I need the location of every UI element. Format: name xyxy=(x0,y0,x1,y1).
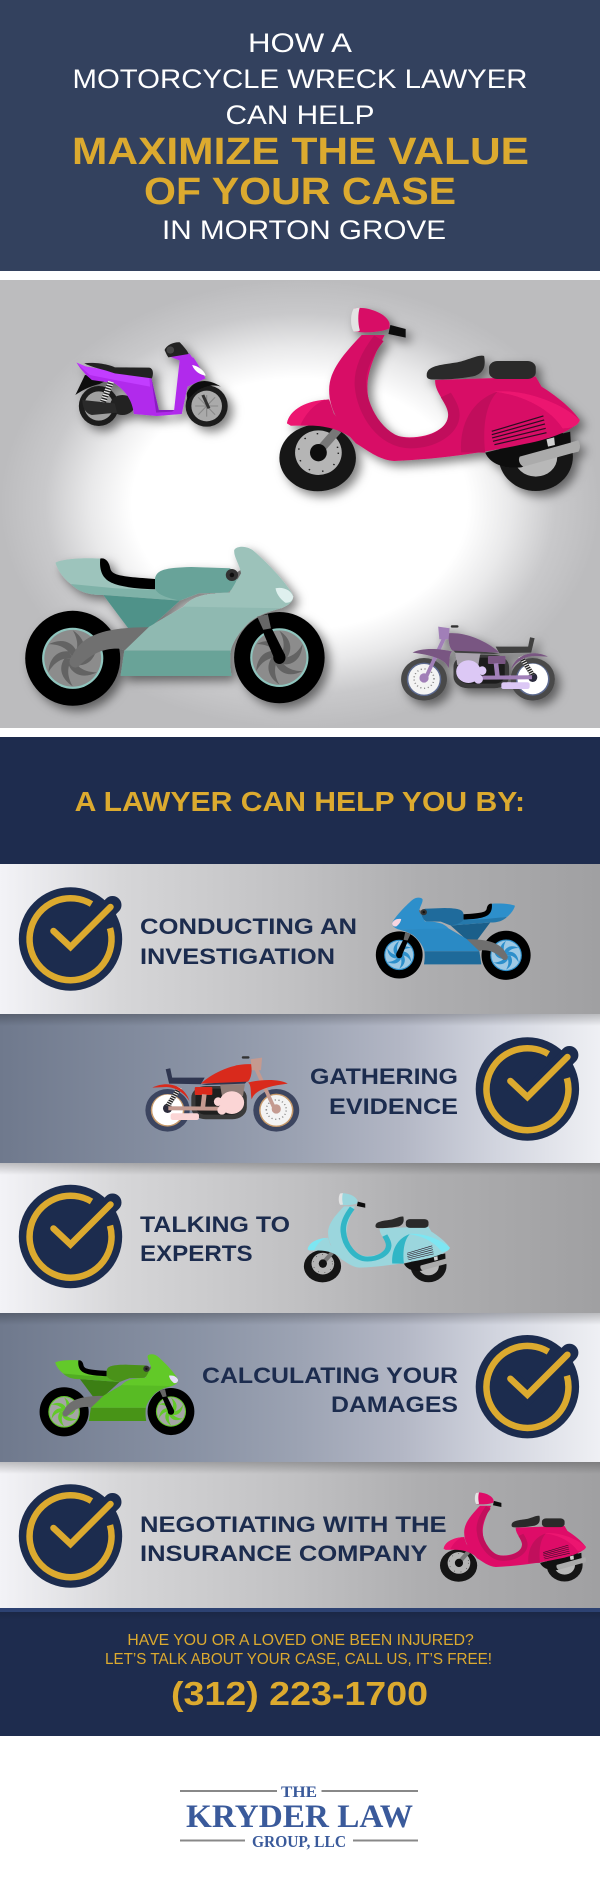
panel: talking to experts xyxy=(0,1163,600,1313)
title: IN MORTON GROVE xyxy=(162,215,446,245)
logo: The Kryder Law Group xyxy=(180,1784,418,1851)
title: MOTORCYCLE WRECK LAWYER xyxy=(72,64,528,94)
title xyxy=(72,28,529,245)
icon: pink scooter xyxy=(279,308,580,491)
logo: The Kryder Law Group: GROUP, LLC xyxy=(252,1832,346,1851)
logo: The Kryder Law Group: KRYDER LAW xyxy=(186,1799,413,1835)
text: negotiating with the insurance company: INSURANCE COMPANY xyxy=(140,1541,428,1566)
phone number: (312) 223-1700 xyxy=(171,1675,428,1712)
heading: A LAWYER CAN HELP YOU BY: xyxy=(75,786,525,817)
text: call to action: HAVE YOU OR A LOVED ONE BEEN INJURED? xyxy=(127,1632,474,1649)
text: gathering evidence xyxy=(310,1064,458,1119)
text: gathering evidence: EVIDENCE xyxy=(329,1094,458,1119)
header panel xyxy=(0,0,600,271)
text: gathering evidence: GATHERING xyxy=(310,1064,458,1089)
text: negotiating with the insurance company: NEGOTIATING WITH THE xyxy=(140,1512,447,1537)
panel: negotiating with the insurance company xyxy=(0,1462,600,1608)
text: conducting an investigation xyxy=(140,914,357,969)
text: conducting an investigation: INVESTIGATION xyxy=(140,944,335,969)
title: HOW A xyxy=(248,28,352,58)
icon: purple moped xyxy=(75,342,228,427)
icon: blue sport motorcycle xyxy=(376,898,531,980)
panel: calculating your damages xyxy=(0,1313,600,1462)
text: talking to experts xyxy=(140,1212,290,1266)
text: calculating your damages: DAMAGES xyxy=(331,1392,458,1417)
text: talking to experts: TALKING TO xyxy=(140,1212,290,1237)
title: CAN HELP xyxy=(226,100,374,130)
text: talking to experts: EXPERTS xyxy=(140,1241,253,1266)
title: OF YOUR CASE xyxy=(144,171,456,213)
title: MAXIMIZE THE VALUE xyxy=(72,131,529,173)
icon: teal scooter xyxy=(304,1193,450,1282)
panel: lawyer heading xyxy=(0,737,600,864)
icon: purple cruiser xyxy=(401,625,555,701)
logo: The Kryder Law Group: THE xyxy=(281,1784,317,1801)
icon: check badge xyxy=(19,887,122,991)
icon: check badge xyxy=(476,1037,579,1141)
icon: pink scooter small xyxy=(440,1492,586,1582)
panel: gathering evidence xyxy=(0,1014,600,1163)
text: calculating your damages xyxy=(202,1363,458,1417)
text: calculating your damages: CALCULATING YOUR xyxy=(202,1363,458,1388)
text: call to action: LET’S TALK ABOUT YOUR CASE, CALL US, IT’S FREE! xyxy=(105,1651,492,1668)
icon: teal sport motorcycle xyxy=(25,547,325,706)
icon: check badge xyxy=(19,1484,122,1588)
panel: conducting an investigation xyxy=(0,864,600,1014)
text: call to action xyxy=(105,1632,492,1668)
text: negotiating with the insurance company xyxy=(140,1512,447,1566)
icon: green sport motorcycle xyxy=(40,1354,194,1436)
icon: check badge xyxy=(19,1185,122,1288)
icon: red cruiser xyxy=(145,1056,299,1132)
panel: call to action xyxy=(0,1608,600,1736)
text: conducting an investigation: CONDUCTING AN xyxy=(140,914,357,939)
panel: motorcycle illustrations xyxy=(0,280,600,728)
icon: check badge xyxy=(476,1335,579,1438)
